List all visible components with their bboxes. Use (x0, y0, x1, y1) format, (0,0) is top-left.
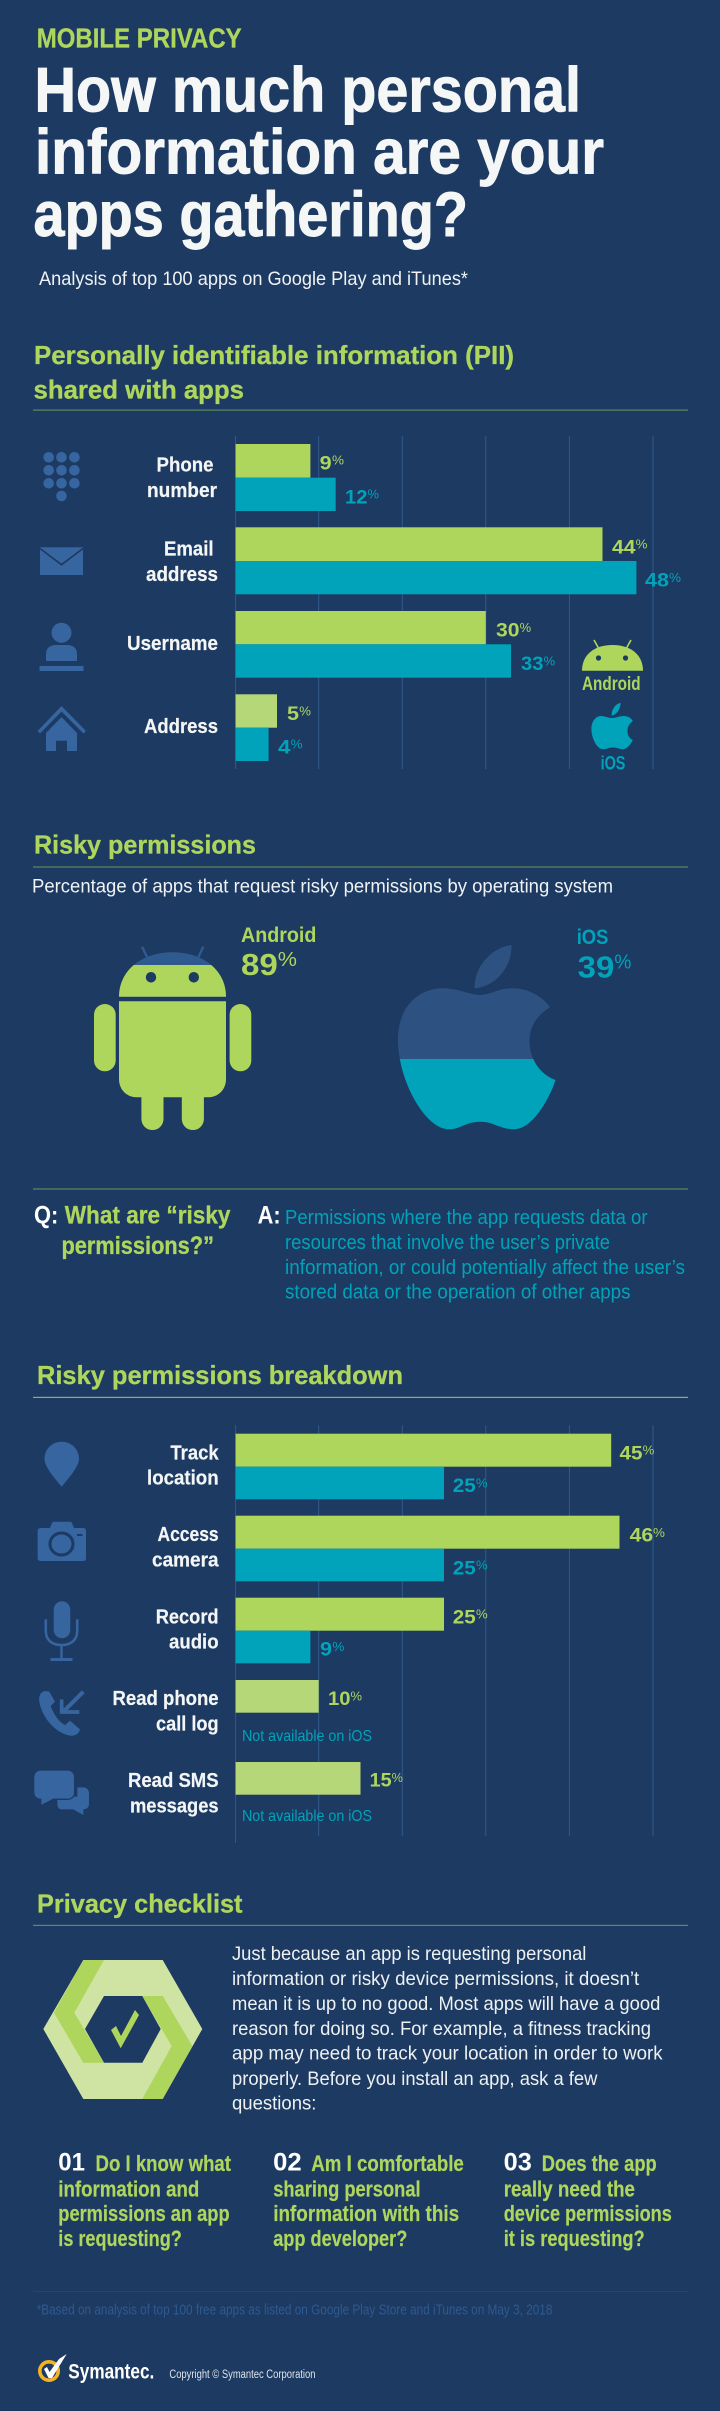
row: access camera: % (476, 1559, 488, 1573)
question 03 (504, 2149, 672, 2251)
row: read SMS messages: 15 (370, 1770, 392, 1792)
question 01: is requesting? (58, 2226, 182, 2251)
row: address: Address (144, 716, 218, 738)
title: apps gathering? (34, 180, 468, 250)
row: username: % (520, 621, 531, 635)
question 01: 01 (58, 2149, 85, 2177)
row: phone number (147, 444, 379, 511)
stat: iOS 39%: iOS (577, 925, 608, 949)
eyebrow: MOBILE PRIVACY (37, 23, 242, 54)
row: phone number: % (368, 488, 379, 502)
row: record audio: audio (169, 1632, 219, 1654)
row: address (144, 694, 311, 761)
icon: android head (582, 640, 643, 671)
row: access camera: 25 (453, 1557, 476, 1579)
bar chart: PII (127, 444, 681, 761)
intro paragraph: reason for doing so. For example, a fitness tracking (232, 2018, 651, 2040)
question 02: sharing personal (273, 2177, 421, 2202)
section heading: PII (33, 340, 688, 411)
row: address: 5 (287, 703, 299, 725)
question 01 (58, 2149, 232, 2251)
icon: incoming call (39, 1691, 83, 1736)
bar chart: breakdown (112, 1434, 665, 1825)
row: track location: 25 (453, 1475, 476, 1497)
header (34, 23, 604, 290)
row: read phone call log: % (350, 1689, 362, 1703)
row: access camera: camera (152, 1550, 219, 1572)
row: track location: 45 (620, 1442, 643, 1464)
intro paragraph: mean it is up to no good. Most apps will have a good (232, 1993, 660, 2015)
section heading: breakdown: Risky permissions breakdown (37, 1360, 403, 1390)
question 02: Am I comfortable (311, 2151, 464, 2176)
row: record audio: % (332, 1640, 344, 1654)
question 03: 03 (504, 2149, 532, 2177)
row: read SMS messages (128, 1762, 403, 1825)
icon: house (38, 706, 86, 751)
description: Percentage of apps that request risky permissions by operating system (32, 876, 613, 898)
answer: resources that involve the user’s private (285, 1232, 610, 1254)
question 03: it is requesting? (504, 2226, 645, 2251)
stat: android 89% (241, 923, 316, 982)
stat: android 89%: Android (241, 923, 316, 947)
stat: android 89%: 89 (241, 947, 278, 982)
stat: iOS 39% (577, 925, 632, 985)
intro paragraph: properly. Before you install an app, ask a few (232, 2068, 598, 2090)
row: username: 33 (521, 653, 544, 675)
row: read SMS messages: % (392, 1771, 403, 1785)
intro paragraph: information or risky device permissions, it doesn’t (232, 1968, 640, 1990)
row: read phone call log (112, 1680, 372, 1745)
row: email address: Email (164, 539, 214, 561)
question: Q: (34, 1201, 58, 1229)
row: read SMS messages: Read SMS (128, 1770, 219, 1792)
answer: information, or could potentially affect the user’s (285, 1257, 685, 1279)
question 02: app developer? (273, 2226, 407, 2251)
icon: microphone (46, 1601, 77, 1661)
question 01: information and (58, 2177, 199, 2202)
title: How much personal (34, 56, 581, 126)
row: email address: address (146, 564, 218, 586)
question 03: Does the app (542, 2151, 657, 2176)
row: email address: 48 (645, 570, 669, 592)
row: username: % (544, 654, 555, 668)
row: record audio: 25 (453, 1606, 476, 1628)
section heading: risky permissions: Risky permissions (34, 829, 256, 859)
row: read SMS messages: Not available on iOS (242, 1808, 372, 1825)
row: username (127, 611, 555, 678)
row: read phone call log: 10 (328, 1688, 351, 1710)
intro paragraph: questions: (232, 2092, 316, 2114)
title: information are your (35, 117, 604, 187)
icon: location pin (44, 1442, 79, 1487)
question 01: Do I know what (96, 2151, 232, 2176)
icon: keypad (43, 452, 80, 501)
intro paragraph: app may need to track your location in order to work (232, 2043, 663, 2065)
row: record audio (156, 1598, 488, 1663)
icon: android robot 89% (94, 947, 251, 1130)
intro paragraph (232, 1943, 663, 2114)
stat: iOS 39%: % (614, 952, 632, 974)
row: phone number: 9 (320, 452, 332, 474)
icon: user (40, 623, 84, 671)
icon: apple small (591, 703, 633, 749)
Symantec logo (40, 2354, 154, 2383)
row: email address: 44 (612, 536, 636, 558)
row: username: 30 (496, 620, 520, 642)
stat: iOS 39%: 39 (578, 950, 614, 985)
row: access camera: Access (158, 1524, 219, 1546)
question 02 (273, 2149, 464, 2251)
question 01: permissions an app (58, 2201, 230, 2226)
question: permissions?” (62, 1232, 214, 1260)
icon: apple 39% (398, 945, 556, 1129)
row: read phone call log: Read phone (112, 1688, 219, 1710)
section heading: PII: shared with apps (34, 375, 244, 405)
question 02: 02 (273, 2149, 302, 2177)
row: track location: % (643, 1444, 654, 1458)
icon: chat bubbles (34, 1770, 89, 1815)
subtitle: Analysis of top 100 apps on Google Play and iTunes* (39, 268, 468, 290)
row: record audio: Record (156, 1606, 219, 1628)
row: email address: % (669, 571, 681, 585)
row: record audio: % (476, 1608, 488, 1622)
question 03: device permissions (504, 2201, 672, 2226)
row: track location (147, 1434, 654, 1499)
title (34, 56, 604, 250)
question 02: information with this (273, 2201, 459, 2226)
footnote: *Based on analysis of top 100 free apps as listed on Google Play Store and iTunes on May 3, 2018 (37, 2302, 552, 2319)
answer: Permissions where the app requests data or (285, 1207, 648, 1229)
row: address: 4 (278, 736, 291, 758)
question: What are “risky (65, 1201, 231, 1229)
row: address: % (291, 738, 303, 752)
row: track location: % (476, 1476, 488, 1490)
stat: android 89%: % (278, 949, 297, 971)
row: phone number: Phone (156, 455, 214, 477)
row: phone number: number (147, 480, 217, 502)
row: phone number: % (332, 454, 344, 468)
icon: hexagon checkmark badge (43, 1960, 202, 2099)
row: track location: Track (170, 1442, 219, 1464)
row: email address (146, 527, 681, 594)
row: email address: % (636, 538, 648, 552)
answer (258, 1201, 685, 1304)
legend label: Android: Android (582, 674, 641, 695)
Symantec logo: Symantec. (68, 2360, 154, 2383)
question (34, 1201, 231, 1260)
row: phone number: 12 (345, 486, 368, 508)
row: access camera: % (653, 1526, 665, 1540)
intro paragraph: Just because an app is requesting personal (232, 1943, 586, 1965)
icon: camera (38, 1522, 86, 1561)
legend (582, 640, 643, 774)
section heading: privacy checklist: Privacy checklist (37, 1889, 243, 1919)
row: read SMS messages: messages (130, 1795, 219, 1817)
row: read phone call log: call log (156, 1713, 219, 1735)
row: address: % (299, 704, 311, 718)
row: record audio: 9 (320, 1639, 332, 1661)
legend label: iOS: iOS (601, 753, 625, 774)
row: track location: location (147, 1468, 219, 1490)
row: read phone call log: Not available on iOS (242, 1728, 372, 1745)
answer: A: (258, 1201, 281, 1229)
row: access camera: 46 (630, 1525, 653, 1547)
question 03: really need the (504, 2177, 635, 2202)
answer: stored data or the operation of other apps (285, 1282, 630, 1304)
copyright: Copyright © Symantec Corporation (169, 2369, 316, 2381)
row: access camera (152, 1516, 665, 1581)
section heading: PII: Personally identifiable information (PII) (34, 340, 514, 370)
row: username: Username (127, 633, 218, 655)
icon: envelope (40, 547, 83, 575)
